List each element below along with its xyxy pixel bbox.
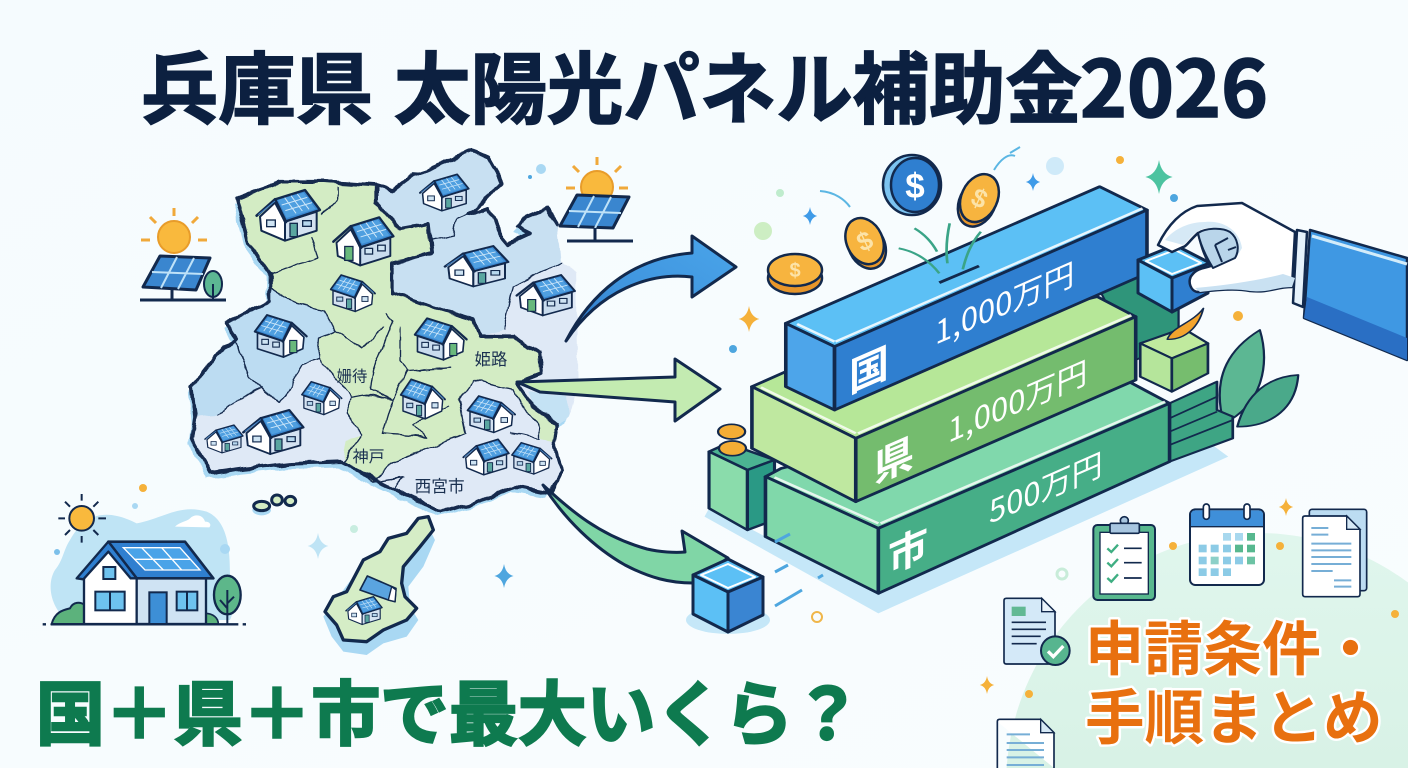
document icons bbox=[997, 504, 1367, 768]
block: city bbox=[765, 382, 1170, 593]
roof solar panels bbox=[123, 548, 200, 570]
Awaji island bbox=[323, 517, 435, 655]
title: 兵庫県 bbox=[141, 28, 373, 140]
stacked subsidy blocks bbox=[705, 187, 1298, 613]
back teal block bbox=[1100, 273, 1179, 360]
gold coin middle: $ bbox=[852, 224, 878, 258]
coins bbox=[768, 155, 1006, 294]
heading: bottom left question: 国＋県＋市で最大いくら？ bbox=[36, 659, 862, 760]
coin slot bbox=[939, 266, 979, 283]
icon: clipboard bbox=[1093, 517, 1155, 600]
left small teal box bbox=[709, 443, 774, 530]
cuff bbox=[1293, 230, 1307, 307]
map label: 西宮市: 西宮市 bbox=[415, 473, 465, 497]
label: 県 1,000万円: 1,000万円 bbox=[948, 347, 1087, 453]
label: 県 1,000万円: 県 bbox=[874, 420, 914, 495]
map of Hyogo bbox=[188, 152, 578, 517]
dashed motion lines bbox=[775, 534, 823, 606]
title: 太陽光パネル補助金 bbox=[394, 28, 1082, 140]
icon: calendar bbox=[1190, 504, 1264, 585]
gold coin right: $ bbox=[967, 181, 993, 215]
heading: application steps: 手順まとめ bbox=[1085, 671, 1382, 757]
island shadow bbox=[323, 527, 435, 655]
sky blob bbox=[51, 509, 233, 620]
sun bbox=[58, 494, 106, 543]
orange drop bbox=[1167, 308, 1203, 339]
blue cube on ground bbox=[686, 559, 770, 634]
island land bbox=[325, 517, 433, 642]
cloud bbox=[175, 515, 210, 527]
solar panel icon right bbox=[560, 157, 633, 241]
roof bbox=[108, 542, 213, 578]
block: prefecture bbox=[752, 297, 1136, 502]
house illustration bottom left bbox=[43, 494, 246, 624]
wrist shading bbox=[1195, 274, 1295, 292]
small islets bbox=[252, 495, 296, 515]
gold coin right bbox=[950, 168, 1006, 233]
leaves bbox=[1220, 330, 1298, 427]
finger shading bbox=[1165, 222, 1242, 258]
heading: application steps: 申請条件・ bbox=[1085, 602, 1380, 687]
blue dollar coin: $ bbox=[905, 167, 925, 206]
map label: 神戸: 神戸 bbox=[353, 443, 385, 467]
title: 2026 bbox=[1080, 28, 1268, 140]
map regions and outlines bbox=[188, 152, 578, 517]
ground line bbox=[43, 621, 246, 628]
gold coin middle bbox=[838, 212, 893, 275]
label: 国 1,000万円: 国 bbox=[849, 330, 889, 405]
gold coin left: $ bbox=[789, 260, 801, 282]
label: 県 1,000万円 bbox=[874, 347, 1087, 495]
icon: document stack bbox=[1303, 509, 1367, 597]
fist bbox=[1198, 229, 1238, 268]
small gold coins bbox=[718, 424, 746, 456]
windows and door bbox=[95, 567, 197, 624]
label: 市 500万円: 市 bbox=[888, 511, 928, 586]
gold coin left bbox=[768, 254, 822, 294]
held blue cube bbox=[1138, 245, 1210, 312]
house walls bbox=[84, 548, 137, 624]
label: 国 1,000万円: 1,000万円 bbox=[935, 249, 1074, 355]
icon: lower document bbox=[997, 719, 1054, 768]
falling sparks bbox=[899, 223, 981, 273]
heading: application steps bbox=[1085, 602, 1382, 757]
title bbox=[141, 28, 1268, 140]
island houses bbox=[346, 576, 396, 625]
hand bbox=[1158, 203, 1295, 292]
blue dollar coin bbox=[883, 155, 941, 215]
label: 国 1,000万円 bbox=[849, 249, 1074, 405]
panel: mint circle behind steps bbox=[1007, 533, 1408, 768]
arrow: teal to city block bbox=[543, 485, 728, 583]
arrow: green to prefecture block bbox=[517, 359, 720, 421]
bush bbox=[52, 603, 85, 624]
map houses bbox=[205, 174, 575, 475]
map label: 姫路: 姫路 bbox=[475, 346, 507, 370]
side stepped box bbox=[1170, 382, 1233, 462]
sleeve bbox=[1304, 230, 1407, 360]
stack shadow bbox=[705, 445, 1228, 613]
small green box bbox=[1140, 328, 1208, 392]
arrow: blue to national block bbox=[566, 236, 736, 341]
icon: document with check bbox=[1004, 598, 1070, 665]
sparkles and dots bbox=[54, 147, 1399, 698]
solar panel icon left bbox=[140, 208, 226, 300]
label: 市 500万円: 500万円 bbox=[989, 439, 1103, 534]
block: national bbox=[786, 187, 1147, 410]
label: 市 500万円 bbox=[888, 439, 1103, 586]
map label: 姗待: 姗待 bbox=[337, 365, 367, 387]
tree bbox=[214, 576, 241, 624]
